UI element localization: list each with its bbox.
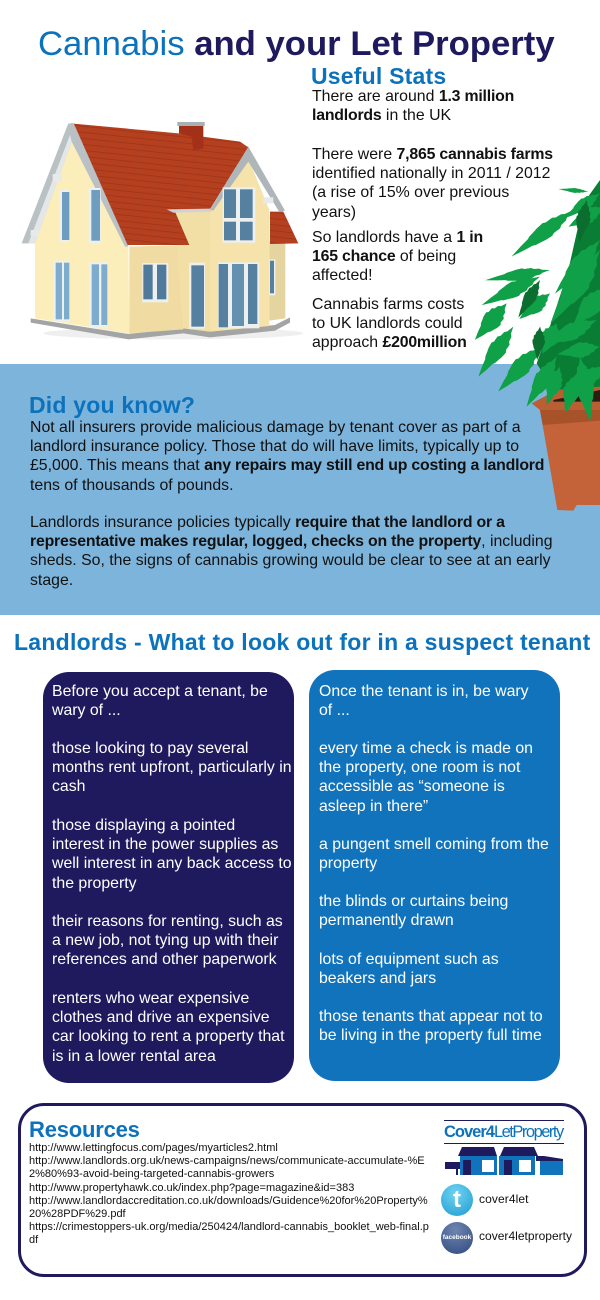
item: blinds drawn: the blinds or curtains being [319, 893, 508, 910]
item: paying rent upfront [52, 740, 292, 795]
panel heading: before: wary of ... [52, 702, 121, 719]
item: equipment [319, 951, 499, 987]
title: Cannabis and your Let Property [38, 25, 555, 63]
list of resource links: http://www.lettingfocus.com/pages/myarticles2.html [29, 1142, 278, 1154]
panel heading: once in [319, 683, 529, 719]
heading: useful stats: Useful Stats [311, 63, 446, 89]
stat: cost to landlords [312, 296, 467, 351]
heading: what to look out for: Landlords - What to look out for in a suspect tenant [14, 629, 590, 655]
stat: chance of being affected: 165 chance of being [312, 248, 456, 265]
item: power supplies interest: those displaying a pointed [52, 817, 235, 834]
item: not living there full time [319, 1008, 543, 1044]
item: expensive clothes and car [52, 990, 285, 1065]
text: regular logged checks: sheds. So, the signs of cannabis growing would be clear to see at an early [30, 552, 551, 569]
item: inaccessible room [319, 740, 533, 815]
text: regular logged checks: stage. [30, 572, 73, 589]
icon: facebook [441, 1222, 473, 1254]
stat: chance of being affected: So landlords have a 1 in [312, 229, 483, 246]
item: reasons for renting: a new job, not tying up with their [52, 932, 278, 949]
item: power supplies interest: well interest in any back access to [52, 855, 292, 872]
item: power supplies interest: the property [52, 875, 137, 892]
item: reasons for renting [52, 913, 283, 968]
cannabis plant in pot [475, 180, 600, 511]
item: pungent smell: a pungent smell coming from the [319, 836, 549, 853]
icon: facebook: facebook [443, 1234, 471, 1241]
stat: cost to landlords: Cannabis farms costs [312, 296, 464, 313]
stat: number of landlords [312, 88, 514, 124]
item: expensive clothes and car: renters who wear expensive [52, 990, 249, 1007]
item: inaccessible room: accessible as “someone is [319, 778, 505, 795]
item: inaccessible room: the property, one room is not [319, 759, 520, 776]
icon: twitter [441, 1184, 473, 1216]
stat: number of landlords: landlords in the UK [312, 107, 451, 124]
text: regular logged checks: Landlords insurance policies typically require that the landlord or a [30, 514, 505, 531]
panel heading: once in: Once the tenant is in, be wary [319, 683, 529, 700]
item: blinds drawn [319, 893, 508, 929]
item: pungent smell: property [319, 855, 377, 872]
text: regular logged checks [30, 514, 553, 589]
label: twitter handle: cover4let [479, 1192, 529, 1206]
list of resource links: http://www.propertyhawk.co.uk/index.php?page=magazine&id=383 [29, 1182, 354, 1194]
item: blinds drawn: permanently drawn [319, 912, 454, 929]
item: expensive clothes and car: clothes and drive an expensive [52, 1009, 270, 1026]
panel heading: before: Before you accept a tenant, be [52, 683, 268, 700]
item: paying rent upfront: those looking to pay several [52, 740, 248, 757]
item: pungent smell [319, 836, 549, 872]
logo: Cover4LetProperty [444, 1120, 564, 1175]
stat: chance of being affected [312, 229, 483, 284]
stat: cannabis farms identified [312, 146, 553, 221]
list of resource links [29, 1142, 429, 1246]
label: facebook handle: cover4letproperty [479, 1229, 572, 1243]
list of resource links: 2%80%93-avoid-being-targeted-cannabis-growers [29, 1168, 274, 1180]
panel heading: before [52, 683, 268, 719]
item: not living there full time: those tenants that appear not to [319, 1008, 543, 1025]
blue band: did you know background [0, 364, 600, 615]
item: reasons for renting: their reasons for renting, such as [52, 913, 283, 930]
item: power supplies interest [52, 817, 292, 892]
heading: resources: Resources [29, 1117, 140, 1142]
text: insurance cover limits: £5,000. This means that any repairs may still end up costing a landlord [30, 457, 544, 474]
text: regular logged checks: representative makes regular, logged, checks on the property, including [30, 533, 553, 550]
stat: cannabis farms identified: (a rise of 15% over previous [312, 184, 509, 201]
panel heading: once in: of ... [319, 702, 350, 719]
house illustration [22, 122, 303, 340]
item: not living there full time: be living in the property full time [319, 1027, 542, 1044]
stat: cost to landlords: approach £200million [312, 334, 467, 351]
text: insurance cover limits [30, 419, 544, 494]
panel: once the tenant is in [309, 670, 560, 1081]
text: insurance cover limits: Not all insurers provide malicious damage by tenant cover as part of a [30, 419, 521, 436]
list of resource links: 20%28PDF%29.pdf [29, 1208, 126, 1220]
item: paying rent upfront: months rent upfront, particularly in [52, 759, 292, 776]
item: equipment: lots of equipment such as [319, 951, 499, 968]
heading: did you know: Did you know? [29, 392, 195, 418]
text: insurance cover limits: tens of thousands of pounds. [30, 477, 233, 494]
item: reasons for renting: references and other paperwork [52, 951, 277, 968]
item: expensive clothes and car: is in a lower rental area [52, 1048, 216, 1065]
panel: resources [18, 1103, 587, 1277]
item: expensive clothes and car: car looking to rent a property that [52, 1028, 285, 1045]
logo: Cover4LetProperty: Cover4LetProperty [444, 1123, 563, 1141]
list of resource links: http://www.landlordaccreditation.co.uk/downloads/Guidence%20for%20Property% [29, 1195, 428, 1207]
stat: cannabis farms identified: identified nationally in 2011 / 2012 [312, 165, 550, 182]
stat: cannabis farms identified: There were 7,865 cannabis farms [312, 146, 553, 163]
list of resource links: http://www.landlords.org.uk/news-campaigns/news/communicate-accumulate-%E [29, 1155, 425, 1167]
item: power supplies interest: interest in the power supplies as [52, 836, 278, 853]
stat: number of landlords: There are around 1.3 million [312, 88, 514, 105]
item: equipment: beakers and jars [319, 970, 436, 987]
list of resource links: df [29, 1234, 38, 1246]
stat: cannabis farms identified: years) [312, 204, 356, 221]
list of resource links: https://crimestoppers-uk.org/media/250424/landlord-cannabis_booklet_web-final.p [29, 1221, 429, 1233]
icon: twitter: t [453, 1186, 461, 1213]
item: inaccessible room: every time a check is made on [319, 740, 533, 757]
stat: chance of being affected: affected! [312, 267, 372, 284]
item: paying rent upfront: cash [52, 778, 85, 795]
stat: cost to landlords: to UK landlords could [312, 315, 463, 332]
item: inaccessible room: asleep in there” [319, 798, 428, 815]
panel: before you accept a tenant [43, 672, 294, 1083]
text: insurance cover limits: landlord insurance policy. Those that do will have limits, typically up to [30, 438, 519, 455]
